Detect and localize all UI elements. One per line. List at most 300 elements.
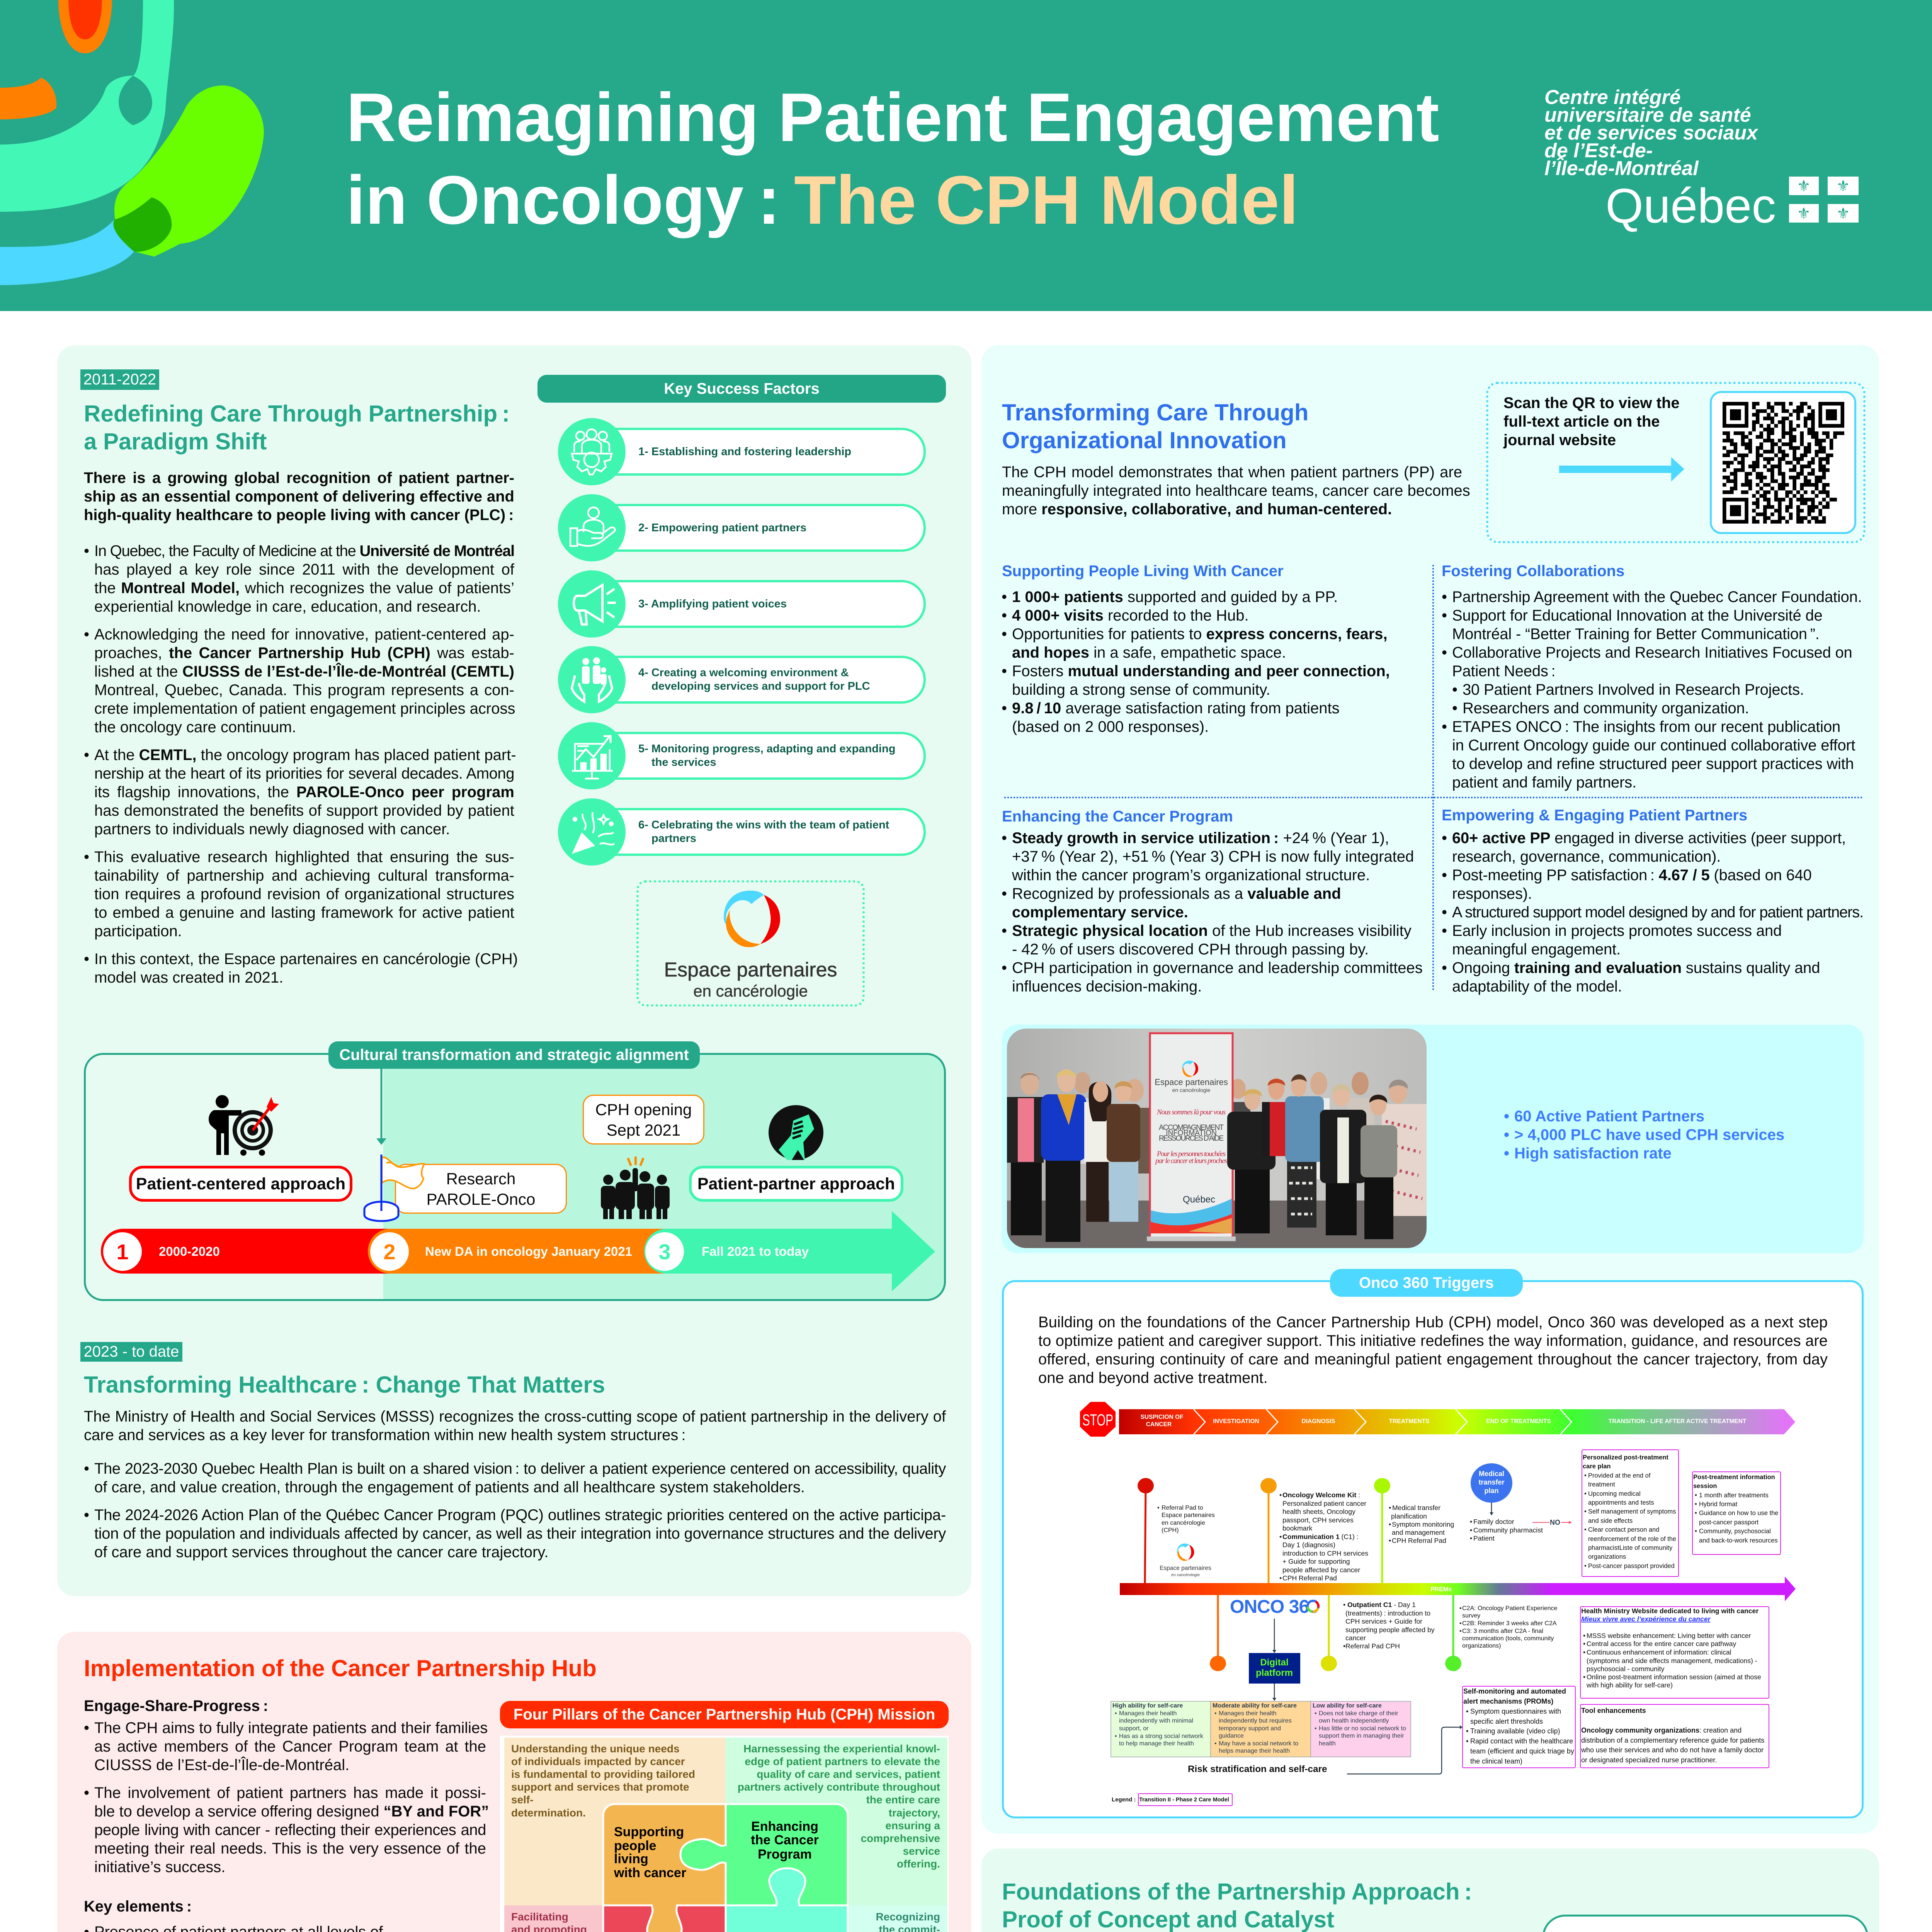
- bullets: 60+ active PP engaged in diverse activities (peer support,: [1452, 830, 1846, 847]
- box: digital platform: Digital: [1260, 1657, 1289, 1668]
- text: onco 360 description: offered, ensuring continuity of care and meaningful patient engagement throughout the cancer trajectory, from day: [1038, 1351, 1828, 1368]
- puzzle labels: with cancer: [614, 1866, 686, 1880]
- label: patient-centered approach: [129, 1166, 352, 1202]
- box: health ministry website: •: [1583, 1648, 1585, 1656]
- bullets: Fosters mutual understanding and peer connection,: [1012, 663, 1390, 680]
- photo: patient partner team: INFORMATION: [1166, 1129, 1217, 1137]
- dividers: [1004, 565, 1863, 992]
- box: post-treatment information session: Guidance on how to use the: [1699, 1510, 1778, 1517]
- text: C2A C2B C3: C3: 3 months after C2A - final: [1462, 1628, 1543, 1634]
- box: post-treatment information session: •: [1695, 1528, 1697, 1535]
- title: [346, 76, 1439, 242]
- box: health ministry website: •: [1583, 1640, 1585, 1648]
- box: self-monitoring: the clinical team): [1470, 1757, 1522, 1765]
- text: scan the QR: [1503, 394, 1680, 449]
- text: medical transfer planification: •: [1389, 1537, 1391, 1544]
- bullets: to develop and refine structured peer support practices with: [1452, 755, 1854, 772]
- header: cultural transformation: Cultural transformation and strategic alignment: [339, 1046, 689, 1063]
- bullet list: history: Montreal, Quebec, Canada. This program represents a con-: [94, 682, 514, 699]
- text: oncology welcome kit: + Guide for supporting: [1282, 1558, 1350, 1565]
- box: research PAROLE-Onco: Research: [446, 1169, 515, 1188]
- table: moderate ability: •: [1214, 1740, 1217, 1747]
- photo: patient partner team: Nous sommes là pour vous: [1156, 1108, 1226, 1116]
- heading: redefining care: [84, 400, 510, 456]
- photo: patient partner team: RESSOURCES D’AIDE: [1159, 1134, 1224, 1143]
- organization name: l’Île-de-Montréal: [1544, 157, 1699, 180]
- intro text: high-quality healthcare to people living with cancer (PLC) :: [84, 507, 514, 524]
- text: oncology welcome kit: Personalized patient cancer: [1282, 1500, 1366, 1507]
- icon: Québec flag: [1789, 177, 1859, 223]
- box: personalized post-treatment care plan: •: [1584, 1563, 1587, 1570]
- box: health ministry website: •: [1583, 1632, 1585, 1639]
- box: health ministry website: Central access for the entire cancer care pathway: [1587, 1640, 1736, 1648]
- icon: person with target: [205, 1095, 279, 1156]
- box: CPH opening: CPH opening: [595, 1100, 692, 1118]
- arrow: to risk table: [1272, 1684, 1276, 1701]
- text: scan the QR: full-text article on the: [1503, 413, 1660, 430]
- text: outpatient C1: - Day 1: [1394, 1601, 1416, 1609]
- table: high ability: •: [1115, 1710, 1117, 1717]
- bullets: ETAPES ONCO : The insights from our recent publication: [1452, 718, 1840, 735]
- text: C2A C2B C3: •: [1459, 1605, 1462, 1612]
- panel: Onco 360 triggers: [1002, 1280, 1864, 1818]
- box: health ministry website: Health Ministry Website dedicated to living with cancer: [1581, 1607, 1759, 1615]
- heading: transforming healthcare: Transforming Healthcare : Change That Matters: [84, 1372, 605, 1398]
- text: key elements: Key elements :: [84, 1898, 192, 1915]
- text: medical transfer planification: •: [1389, 1520, 1391, 1528]
- icon: monitor chart: [558, 722, 626, 789]
- table: high ability: [1111, 1701, 1211, 1757]
- box: personalized post-treatment care plan: organizations: [1588, 1553, 1626, 1560]
- bullet list: engage: The CPH aims to fully integrate patients and their families: [94, 1719, 488, 1736]
- text: oncology welcome kit: bookmark: [1282, 1524, 1312, 1532]
- bullets: - 42 % of users discovered CPH through passing by.: [1012, 941, 1369, 958]
- box: post-treatment information session: •: [1695, 1501, 1697, 1508]
- bullet list: history: In Quebec, the Faculty of Medicine at the Université de Montréal: [94, 543, 514, 560]
- table: low ability: Has little or no social network to: [1319, 1725, 1406, 1732]
- box: personalized post-treatment care plan: Clear contact person and: [1588, 1526, 1659, 1533]
- table: high ability: High ability for self-care: [1112, 1702, 1183, 1709]
- text: family doctor list: Community pharmacist: [1473, 1526, 1543, 1534]
- icon: flag: [363, 1155, 429, 1228]
- organization name: [1544, 88, 1758, 177]
- photo: patient partner team: Québec: [1183, 1194, 1215, 1205]
- photo: patient partner team: Espace partenaires: [1155, 1077, 1228, 1087]
- bullets: responses).: [1452, 885, 1532, 902]
- factor 6: 6- Celebrating the wins with the team of patient: [638, 819, 889, 831]
- text: understanding: [511, 1743, 695, 1819]
- subheading: Enhancing the Cancer Program: [1002, 808, 1233, 825]
- text: harnessing: edge of patient partners to elevate the: [745, 1755, 940, 1767]
- heading: foundations: Foundations of the Partnership Approach :: [1002, 1879, 1472, 1905]
- box: personalized post-treatment care plan: Provided at the end of: [1588, 1472, 1651, 1479]
- factor 5: [558, 722, 928, 789]
- chevron band: care stages: DIAGNOSIS: [1302, 1418, 1335, 1425]
- box: self-monitoring: Self-monitoring and automated: [1463, 1687, 1566, 1695]
- node: medical transfer plan: transfer: [1478, 1478, 1505, 1486]
- venn circles and labels: [1544, 1917, 1867, 1932]
- logo: Québec wordmark: Québec: [1605, 179, 1776, 233]
- bullet list: engage: The involvement of patient partners has made it possi-: [94, 1784, 486, 1801]
- text: referral pad: (CPH): [1162, 1527, 1179, 1534]
- text: oncology welcome kit: Oncology Welcome Kit: [1282, 1491, 1356, 1499]
- box: personalized post-treatment care plan: •: [1584, 1490, 1587, 1497]
- text: medical transfer planification: and management: [1392, 1529, 1445, 1536]
- bullet list: history: the Montreal Model, which recognizes the value of patients’: [94, 580, 514, 597]
- bullets: Montréal - “Better Training for Better Communication ”.: [1452, 626, 1820, 643]
- photo: patient partner team: Pour les personnes touchées: [1156, 1150, 1226, 1158]
- heading: transforming care: Organizational Innovation: [1002, 427, 1287, 453]
- logo: Espace partenaires en cancérologie: Espace partenaires: [664, 959, 837, 981]
- text: harnessing: quality of care and services, patient: [757, 1768, 940, 1780]
- text: engage share progress: Engage-Share-Progress :: [84, 1697, 268, 1714]
- list: key figures: 60 Active Patient Partners: [1514, 1108, 1704, 1125]
- intro text: [1002, 463, 1462, 519]
- box: self-monitoring: Training available (video clip): [1470, 1727, 1560, 1735]
- bullet list: history: participation.: [94, 923, 182, 940]
- text: medical transfer planification: •: [1389, 1504, 1391, 1512]
- box: health ministry website: MSSS website enhancement: Living better with cancer: [1587, 1632, 1751, 1639]
- bullets: 4 000+ visits recorded to the Hub.: [1012, 607, 1249, 624]
- bullet list: plans: [94, 1459, 946, 1561]
- icon: stop sign: [1080, 1401, 1116, 1437]
- header: four pillars: Four Pillars of the Cancer Partnership Hub (CPH) Mission: [514, 1706, 935, 1723]
- puzzle labels: Program: [758, 1847, 812, 1862]
- text: referral pad: [1157, 1505, 1215, 1534]
- pill: Onco 360 Triggers: Onco 360 Triggers: [1359, 1274, 1494, 1291]
- legend: Legend :: [1112, 1796, 1136, 1803]
- box: personalized post-treatment care plan: •: [1584, 1472, 1587, 1479]
- bullets: [1012, 829, 1423, 996]
- box: personalized post-treatment care plan: appointments and tests: [1588, 1499, 1654, 1506]
- box: post-treatment information session: Community, psychosocial: [1699, 1528, 1771, 1535]
- factor 5: 5- Monitoring progress, adapting and expanding: [638, 743, 895, 755]
- label: patient-partner approach: Patient-partner approach: [697, 1175, 895, 1193]
- bullet list: history: has played a key role since 2011 with the development of: [94, 561, 514, 578]
- diagram: four pillars puzzle: [500, 1736, 949, 1932]
- callout: QR to article: [1486, 382, 1866, 543]
- bullet list: history: has demonstrated the benefits of support provided by patient: [94, 802, 514, 819]
- box: health ministry website: psychosocial - community: [1587, 1665, 1665, 1673]
- text: onco 360 description: to optimize patient and caregiver support. This initiative redefines the way information, guidance, and resources are: [1038, 1332, 1828, 1349]
- box: self-monitoring: Symptom questionnaires with: [1470, 1708, 1561, 1715]
- timeline arrow: 2: [383, 1240, 396, 1264]
- table: moderate ability: helps manage their health: [1219, 1748, 1290, 1754]
- text: harnessing: partners actively contribute throughout: [738, 1781, 940, 1793]
- title: Reimagining Patient Engagement: [346, 79, 1439, 156]
- text: C2A C2B C3: C2B: Reminder 3 weeks after C2A: [1462, 1620, 1557, 1627]
- logo: mini Espace partenaires: en cancérologie: [1171, 1573, 1200, 1577]
- table: high ability: to help manage their health: [1119, 1740, 1194, 1747]
- box: post-treatment information session: and back-to-work resources: [1699, 1537, 1778, 1544]
- bullet list: plans: of care, and value creation, through the engagement of patients and all healthcare system stakeholders.: [94, 1479, 805, 1496]
- box: tool enhancements: who use their services and who do not have a family doctor: [1581, 1746, 1764, 1754]
- logo: Espace partenaires en cancérologie: [636, 880, 865, 1007]
- intro text: meaningfully integrated into healthcare teams, cancer care becomes: [1002, 482, 1470, 499]
- box: CPH opening: Sept 2021: [607, 1121, 680, 1139]
- table: moderate ability: •: [1214, 1710, 1217, 1717]
- table: moderate ability: Moderate ability for self-care: [1213, 1702, 1297, 1709]
- bullets: Recognized by professionals as a valuable and: [1012, 885, 1341, 902]
- bullet list: history: Acknowledging the need for innovative, patient-centered ap-: [94, 626, 514, 643]
- factor 3: [558, 570, 928, 638]
- factor 1: 1- Establishing and fostering leadership: [638, 445, 851, 457]
- table: low ability: health: [1319, 1740, 1336, 1747]
- table: low ability: Low ability for self-care: [1313, 1702, 1382, 1709]
- table: moderate ability: temporary support and: [1219, 1725, 1281, 1732]
- box: health ministry website: Online post-treatment information session (aimed at those: [1587, 1673, 1761, 1681]
- text: understanding: of individuals impacted by cancer: [511, 1755, 685, 1767]
- bullet list: history: In this context, the Espace partenaires en cancérologie (CPH): [94, 951, 518, 968]
- icon: Québec flag: ⚜: [1836, 177, 1850, 195]
- text: onco 360 description: Building on the foundations of the Cancer Partnership Hub (CPH) model, Onco 360 was developed as a next step: [1038, 1314, 1828, 1331]
- text: family doctor list: [1470, 1518, 1543, 1542]
- factor 5: the services: [651, 756, 716, 769]
- photo: patient partner team: en cancérologie: [1172, 1087, 1211, 1093]
- text: ministry: [84, 1407, 946, 1444]
- bullets: [1452, 829, 1863, 996]
- chevron band: care stages: INVESTIGATION: [1213, 1418, 1259, 1425]
- icon: people cheering: [600, 1156, 671, 1219]
- text: understanding: Understanding the unique needs: [511, 1743, 680, 1755]
- table: low ability: Does not take charge of their: [1319, 1710, 1398, 1717]
- text: oncology welcome kit: passport, CPH services: [1282, 1516, 1354, 1524]
- bullet list: engage: initiative’s success.: [94, 1859, 225, 1876]
- node: medical transfer plan: Medical: [1479, 1470, 1504, 1478]
- box: post-treatment information session: •: [1695, 1492, 1697, 1499]
- timeline arrow: 1: [116, 1240, 129, 1264]
- text: referral pad: Espace partenaires: [1162, 1512, 1215, 1519]
- text: harnessing: ensuring a: [885, 1820, 940, 1832]
- bullets: influences decision-making.: [1012, 978, 1202, 995]
- bullets: [1452, 588, 1862, 792]
- table: moderate ability: [1211, 1701, 1311, 1757]
- factor 2: 2- Empowering patient partners: [638, 522, 806, 534]
- box: health ministry website: •: [1583, 1673, 1585, 1681]
- table: high ability: independently with minimal: [1119, 1718, 1193, 1724]
- bullets: (based on 2 000 responses).: [1012, 718, 1209, 735]
- text: oncology welcome kit: people affected by cancer: [1282, 1566, 1360, 1574]
- text: facilitating: Facilitating: [511, 1911, 568, 1923]
- bullet list: plans: tion of the population and individuals affected by cancer, as well as their integration into governance structures and the delivery: [94, 1525, 946, 1542]
- puzzle labels: Supporting: [614, 1825, 684, 1839]
- column: enhancing the cancer program: [1002, 806, 1427, 996]
- bullets: building a strong sense of community.: [1012, 681, 1270, 698]
- box: personalized post-treatment care plan: •: [1584, 1526, 1587, 1533]
- factor 4: [558, 646, 928, 713]
- subheading: Empowering & Engaging Patient Partners: [1442, 807, 1747, 824]
- list: key figures: [1514, 1107, 1784, 1163]
- bullet list: history: crete implementation of patient engagement principles across: [94, 700, 515, 717]
- bullets: Researchers and community organization.: [1463, 700, 1749, 717]
- organization name: Centre intégré: [1544, 86, 1681, 109]
- list: key figures: > 4,000 PLC have used CPH services: [1514, 1126, 1784, 1143]
- box: personalized post-treatment care plan: •: [1584, 1508, 1587, 1515]
- bullets: 1 000+ patients supported and guided by a PP.: [1012, 588, 1338, 605]
- box: research PAROLE-Onco: PAROLE-Onco: [427, 1190, 535, 1208]
- table: moderate ability: independently but requires: [1219, 1718, 1292, 1724]
- bullet list: engage: people living with cancer - reflecting their experiences and: [94, 1821, 486, 1838]
- chevron band: care stages: TREATMENTS: [1389, 1418, 1429, 1425]
- text: oncology welcome kit: Communication 1: [1282, 1533, 1340, 1541]
- box: personalized post-treatment care plan: pharmacistListe of community: [1588, 1544, 1673, 1551]
- text: oncology welcome kit: CPH Referral Pad: [1282, 1574, 1337, 1582]
- arrow: NO: NO: [1550, 1519, 1560, 1526]
- bullet list: history: the oncology care continuum.: [94, 719, 296, 736]
- bullet list: history: [94, 542, 514, 987]
- text: medical transfer planification: CPH Referral Pad: [1392, 1537, 1446, 1544]
- table: low ability: •: [1315, 1710, 1317, 1717]
- table: moderate ability: guidance: [1219, 1733, 1244, 1739]
- column: supporting people: [1002, 561, 1427, 739]
- factor 3: 3- Amplifying patient voices: [638, 597, 787, 610]
- text: scan the QR: Scan the QR to view the: [1503, 395, 1680, 412]
- icon: megaphone: [558, 570, 626, 638]
- photo: patient partner team: par le cancer et leurs proches: [1155, 1157, 1227, 1165]
- chevron band: care stages: SUSPICION OF: [1140, 1414, 1184, 1420]
- diagram: partnership venn: [1542, 1915, 1869, 1932]
- bullets: Steady growth in service utilization : +24 % (Year 1),: [1012, 830, 1389, 847]
- text: harnessing: Harnessessing the experiential knowl-: [743, 1743, 940, 1755]
- PREMs timeline bar: PREMs: [1430, 1586, 1452, 1593]
- bullets: Collaborative Projects and Research Initiatives Focused on: [1452, 644, 1852, 661]
- table: low ability: [1311, 1701, 1411, 1757]
- arrow: to QR: [1559, 457, 1684, 481]
- bullet list: engage: CIUSSS de l’Est-de-l’Île-de-Montréal.: [94, 1757, 349, 1774]
- photo: patient partner team: [1007, 1029, 1427, 1248]
- bullets: patient and family partners.: [1452, 774, 1636, 791]
- text: understanding: is fundamental to providing tailored: [511, 1768, 695, 1780]
- box: tool enhancements: Tool enhancements: [1581, 1707, 1646, 1714]
- box: personalized post-treatment care plan: reenforcement of the role of the: [1588, 1536, 1676, 1543]
- text: family doctor list: Patient: [1473, 1534, 1495, 1542]
- bullet list: history: tainability of partnership and achieving cultural transforma-: [94, 867, 514, 884]
- bullet list: key elements: [84, 1922, 493, 1932]
- heading: redefining care: Redefining Care Through Partnership :: [84, 401, 510, 427]
- bullet list: plans: The 2023-2030 Quebec Health Plan is built on a shared vision : to deliver a patient experience centered on accessibility, quality: [94, 1460, 946, 1477]
- panel: photo and figures: [1002, 1025, 1864, 1253]
- factor 1: [558, 418, 928, 485]
- table: low ability: support them in managing their: [1319, 1733, 1404, 1739]
- bullet list: history: This evaluative research highlighted that ensuring the sus-: [94, 849, 514, 866]
- bullet list: engage: [94, 1719, 486, 1876]
- text: oncology welcome kit: •: [1279, 1491, 1282, 1499]
- box: personalized post-treatment care plan: Self management of symptoms: [1588, 1508, 1676, 1515]
- text: referral pad: en cancérologie: [1162, 1520, 1205, 1526]
- bullets: +37 % (Year 2), +51 % (Year 3) CPH is now fully integrated: [1012, 848, 1414, 865]
- heading: implementation: Implementation of the Cancer Partnership Hub: [84, 1655, 597, 1681]
- diagram: cultural transformation timeline: [84, 1041, 946, 1301]
- bullets: Ongoing training and evaluation sustains quality and: [1452, 959, 1820, 976]
- bullets: 30 Patient Partners Involved in Research Projects.: [1463, 681, 1804, 698]
- factor 4: developing services and support for PLC: [651, 680, 870, 692]
- puzzle labels: Enhancing: [751, 1819, 818, 1834]
- bullet list: history: proaches, the Cancer Partnership Hub (CPH) was estab-: [94, 645, 514, 662]
- icon: people and gear: [558, 418, 626, 485]
- text: family doctor list: •: [1470, 1534, 1472, 1542]
- QR code card: [1710, 391, 1856, 534]
- icon: Québec flag: ⚜: [1797, 177, 1811, 195]
- box: self-monitoring: [1463, 1686, 1575, 1768]
- chevron band: care stages: END OF TREATMENTS: [1486, 1418, 1551, 1425]
- box: personalized post-treatment care plan: Personalized post-treatment: [1583, 1454, 1668, 1461]
- box: personalized post-treatment care plan: and side effects: [1588, 1517, 1633, 1524]
- text: outpatient C1: •: [1343, 1601, 1345, 1609]
- box: post-treatment information session: post-cancer passport: [1699, 1519, 1759, 1526]
- box: self-monitoring: Rapid contact with the healthcare: [1470, 1737, 1573, 1745]
- text: oncology welcome kit: (C1) :: [1341, 1533, 1358, 1541]
- box: digital platform: platform: [1256, 1668, 1293, 1678]
- bullet list: engage: ble to develop a service offering designed “BY and FOR”: [94, 1803, 489, 1820]
- table: moderate ability: Manages their health: [1219, 1710, 1276, 1717]
- text: harnessing: offering.: [897, 1858, 940, 1870]
- text: harnessing: comprehensive: [861, 1832, 940, 1844]
- text: medical transfer planification: [1389, 1504, 1454, 1544]
- table: high ability: •: [1115, 1733, 1117, 1740]
- text: facilitating: [511, 1911, 662, 1932]
- box: personalized post-treatment care plan: [1582, 1450, 1679, 1577]
- organization name: universitaire de santé: [1544, 104, 1751, 126]
- logo: Espace partenaires en cancérologie: en cancérologie: [693, 982, 808, 1000]
- bullet list: history: tion requires a profound revision of organizational structures: [94, 886, 514, 903]
- text: family doctor list: •: [1470, 1526, 1472, 1534]
- node: medical transfer plan: [1471, 1463, 1512, 1515]
- bullet list: engage: as active members of the Cancer Program team at the: [94, 1738, 486, 1755]
- bullets: CPH participation in governance and leadership committees: [1012, 959, 1423, 976]
- table: low ability: own health independently: [1319, 1718, 1389, 1724]
- panel: redefining care and transforming healthcare: [57, 345, 971, 1596]
- box: health ministry website: (symptoms and side effects management, medications) -: [1587, 1657, 1757, 1665]
- puzzle labels: living: [614, 1852, 648, 1866]
- logo: Onco 360: ONCO 360: [1230, 1597, 1319, 1617]
- heading: transforming care: Transforming Care Through: [1002, 400, 1308, 425]
- legend: Transition II - Phase 2 Care Model: [1139, 1797, 1229, 1803]
- bullets: Opportunities for patients to express concerns, fears,: [1012, 626, 1388, 643]
- bullet list: plans: of care and support services throughout the cancer care trajectory.: [94, 1544, 548, 1561]
- list: key figures: High satisfaction rate: [1514, 1145, 1672, 1162]
- column: fostering collaborations: [1442, 561, 1867, 793]
- timeline arrow: New DA in oncology January 2021: [425, 1244, 632, 1259]
- chevron band: care stages: CANCER: [1146, 1421, 1172, 1428]
- intro text: [84, 469, 514, 524]
- text: medical transfer planification: Symptom monitoring: [1392, 1520, 1454, 1528]
- right shaded area and frame: [84, 1053, 946, 1301]
- label: risk stratification: Risk stratification and self-care: [1188, 1764, 1327, 1774]
- text: C2A C2B C3: organizations): [1462, 1643, 1501, 1649]
- text: understanding: determination.: [511, 1807, 586, 1819]
- tag: 2011-2022: 2011-2022: [83, 371, 156, 388]
- icon: Québec flag: ⚜: [1797, 205, 1811, 223]
- bullet list: history: its flagship innovations, the PAROLE-Onco peer program: [94, 784, 514, 801]
- logo: mini Espace partenaires: Espace partenaires: [1160, 1565, 1211, 1571]
- text: oncology welcome kit: •: [1279, 1533, 1282, 1541]
- bullets: research, governance, communication).: [1452, 848, 1721, 865]
- text: family doctor list: •: [1470, 1518, 1472, 1526]
- text: oncology welcome kit: •: [1279, 1574, 1282, 1582]
- text: outpatient C1: cancer: [1345, 1634, 1366, 1642]
- text: oncology welcome kit: introduction to CPH services: [1282, 1549, 1368, 1557]
- text: C2A C2B C3: communication (tools, community: [1462, 1635, 1554, 1642]
- title: in Oncology : The CPH Model: [346, 162, 1298, 238]
- panel: implementation of the cancer partnership hub: [57, 1632, 971, 1932]
- header: key success factors: [537, 375, 946, 403]
- text: scan the QR: journal website: [1503, 432, 1616, 449]
- text: C2A C2B C3: •: [1459, 1628, 1462, 1634]
- photo: patient partner team: ACCOMPAGNEMENT: [1159, 1124, 1224, 1132]
- table: low ability: •: [1315, 1725, 1317, 1732]
- text: C2A C2B C3: [1459, 1605, 1557, 1649]
- bullets: adaptability of the model.: [1452, 978, 1622, 995]
